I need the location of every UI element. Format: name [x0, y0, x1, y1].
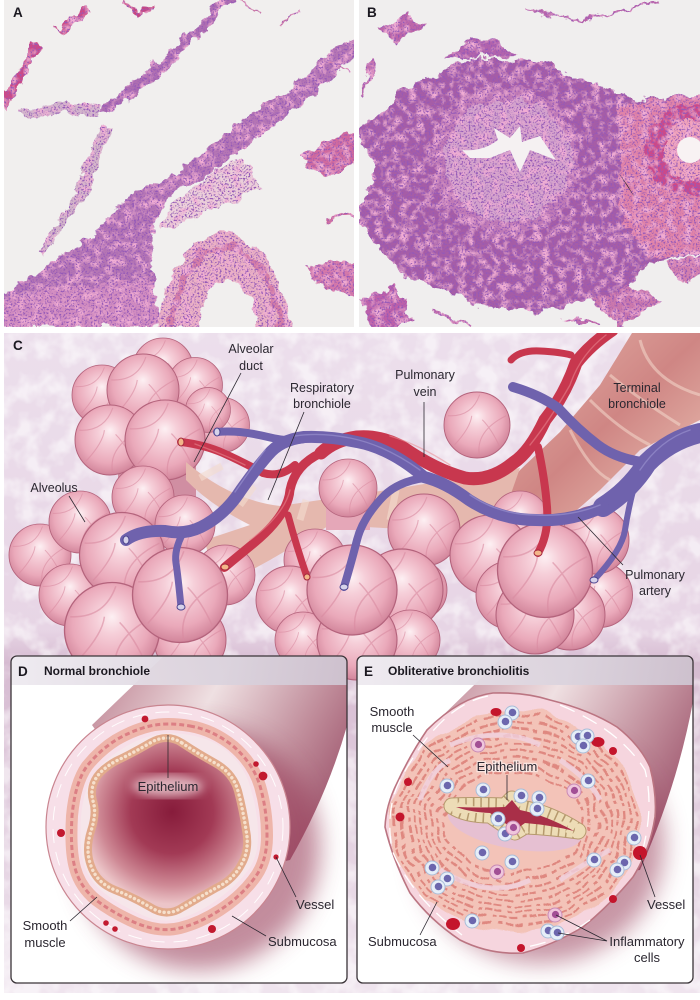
- panel label: B: B: [367, 5, 377, 20]
- airway tube: [445, 660, 692, 870]
- panel E: obliterative bronchiolitis: [357, 650, 695, 983]
- label: submucosa: [368, 902, 437, 949]
- label: epithelium: [477, 759, 537, 800]
- header band: [11, 656, 347, 685]
- label: alveolus: [30, 481, 85, 522]
- vessels: [396, 708, 647, 952]
- panel C: anatomy of the terminal airway: [4, 330, 700, 993]
- pulmonary vein: red vessels: [178, 330, 612, 580]
- label: pulmonary vein: vein: [414, 385, 437, 399]
- epithelium and lumen: [88, 738, 247, 912]
- panel A: histology of normal bronchiole: [0, 0, 360, 330]
- label: terminal bronchiole: bronchiole: [608, 397, 666, 411]
- label: vessel: Vessel: [647, 897, 685, 912]
- heading E: Obliterative bronchiolitis: [388, 664, 530, 678]
- label: terminal bronchiole: Terminal: [613, 381, 661, 395]
- alveoli cluster upper left: [72, 338, 250, 496]
- label: inflammatory cells: cells: [634, 950, 660, 965]
- respiratory bronchiole tube: [186, 462, 520, 568]
- label: smooth muscle: muscle: [24, 935, 66, 950]
- label: pulmonary artery: artery: [639, 584, 672, 598]
- panel D: normal bronchiole: [11, 650, 350, 983]
- label: smooth muscle: Smooth: [23, 918, 67, 933]
- panel label: C: C: [13, 338, 23, 353]
- panel B: histology of obliterative bronchiolitis: [358, 0, 700, 334]
- label: pulmonary artery: Pulmonary: [625, 568, 686, 582]
- label: pulmonary vein: Pulmonary: [395, 368, 456, 382]
- label: smooth muscle: Smooth: [370, 704, 414, 719]
- label: submucosa: Submucosa: [268, 934, 337, 949]
- label: inflammatory cells: [556, 915, 685, 965]
- label: inflammatory cells: Inflammatory: [609, 934, 685, 949]
- label: vessel: Vessel: [296, 897, 334, 912]
- label: alveolar duct: [194, 342, 274, 462]
- pulmonary artery: purple vessels: [123, 387, 700, 610]
- epithelium and lumen: [452, 799, 578, 832]
- label: epithelium: [132, 735, 204, 797]
- vessels: [57, 716, 279, 933]
- inflammatory cells: [425, 706, 641, 940]
- label: respiratory bronchiole: [268, 381, 355, 500]
- label: submucosa: Submucosa: [368, 934, 437, 949]
- heading D: D: [18, 664, 28, 679]
- wall outline: [385, 693, 655, 953]
- label: submucosa: [232, 916, 337, 949]
- heading D: Normal bronchiole: [44, 664, 150, 678]
- label: epithelium: Epithelium: [138, 779, 198, 794]
- heading E: E: [364, 664, 373, 679]
- label: smooth muscle: muscle: [371, 720, 413, 735]
- alveoli cluster middle: [256, 459, 460, 680]
- label: alveolus: Alveolus: [30, 481, 78, 495]
- header band: [357, 656, 693, 685]
- label: smooth muscle: [370, 704, 448, 767]
- label: vessel: [640, 855, 685, 912]
- label: vessel: [276, 857, 334, 912]
- alveoli cluster right: [450, 491, 632, 654]
- label: pulmonary vein: [395, 368, 456, 457]
- airway tube: [92, 660, 346, 861]
- terminal bronchiole tube: [512, 333, 700, 514]
- label: alveolar duct: Alveolar: [228, 342, 274, 356]
- label: terminal bronchiole: [608, 381, 666, 411]
- smooth muscle: [71, 724, 267, 930]
- label: respiratory bronchiole: bronchiole: [293, 397, 351, 411]
- alveoli cluster lower left: [9, 466, 255, 678]
- label: smooth muscle: [23, 897, 97, 950]
- label: pulmonary artery: [578, 517, 686, 598]
- bronchiole wall ring: [46, 705, 290, 949]
- panel label: A: A: [13, 5, 23, 20]
- label: respiratory bronchiole: Respiratory: [290, 381, 355, 395]
- thickened smooth muscle: [391, 712, 639, 932]
- label: alveolar duct: duct: [239, 359, 263, 373]
- label: epithelium: Epithelium: [477, 759, 537, 774]
- alveolus single: [444, 392, 510, 458]
